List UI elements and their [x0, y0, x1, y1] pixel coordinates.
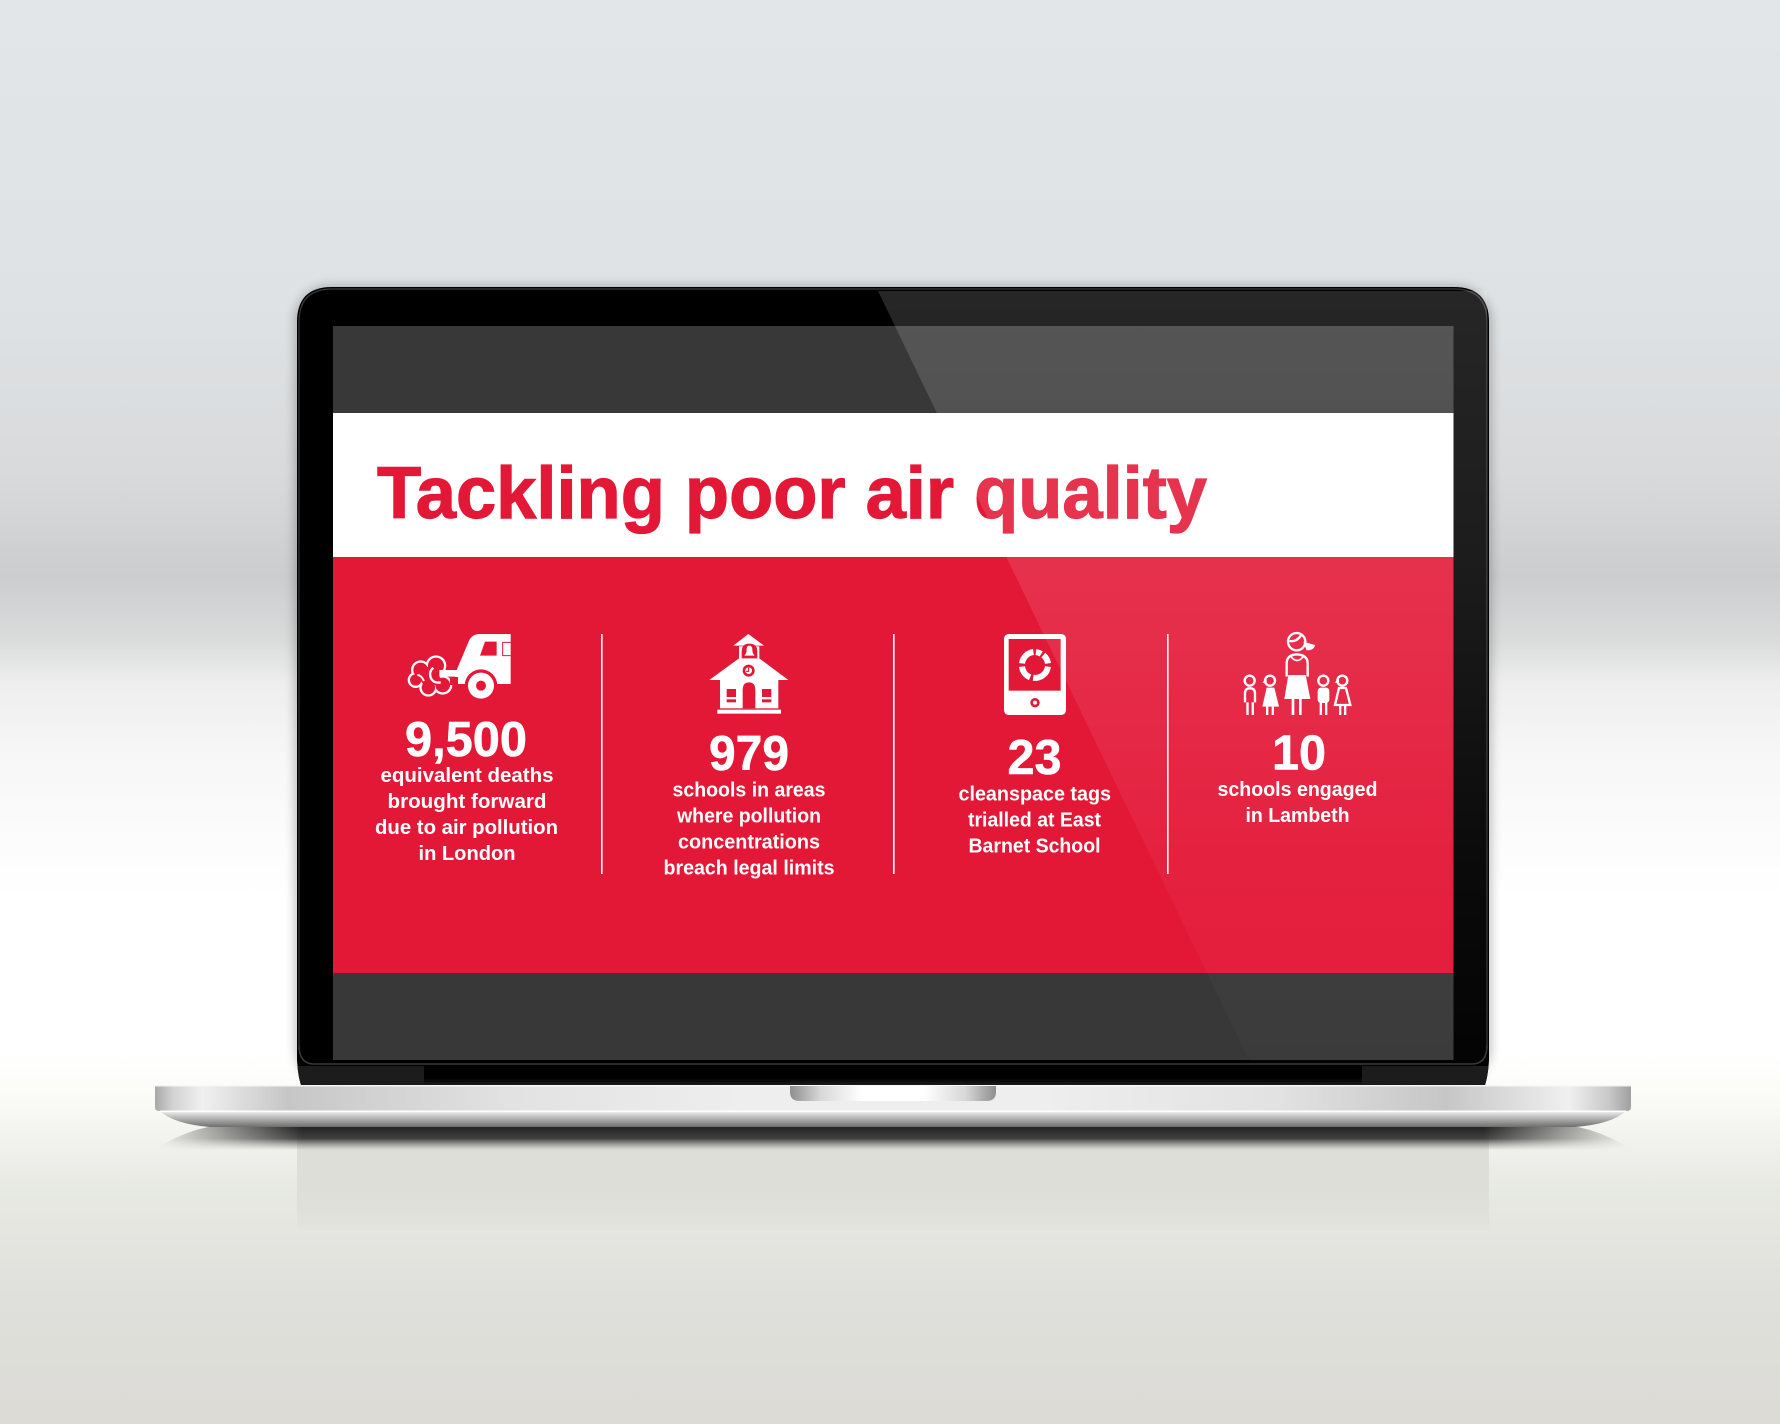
description: concentrations	[678, 830, 820, 854]
laptop	[155, 285, 1631, 1152]
icon: teacher with children	[1245, 633, 1350, 715]
base lower curve	[160, 1111, 1626, 1127]
description: schools engaged	[1218, 778, 1378, 801]
stat: 10 schools	[1218, 633, 1378, 827]
description: in London	[418, 842, 516, 865]
reflection of laptop on floor	[297, 1127, 1489, 1230]
number: 9,500	[405, 713, 527, 767]
icon: tablet with donut chart	[1004, 634, 1066, 715]
description: Barnet School	[968, 834, 1100, 858]
description: brought forward	[388, 790, 546, 813]
laptop lid	[297, 287, 1489, 1085]
divider	[1167, 634, 1169, 874]
description: in Lambeth	[1246, 804, 1350, 827]
lid soft shadow	[294, 285, 1492, 1083]
description	[1218, 778, 1378, 827]
description: cleanspace tags	[958, 782, 1111, 806]
screen top band	[333, 326, 1454, 413]
description: schools in areas	[672, 778, 826, 802]
laptop base	[155, 1085, 1631, 1152]
description: due to air pollution	[375, 816, 558, 839]
screen glare	[878, 291, 1487, 1062]
stat: 9,500 deaths	[375, 634, 558, 865]
description	[375, 764, 558, 865]
stat: 23 tags	[958, 634, 1111, 858]
title band	[333, 413, 1454, 557]
description: equivalent deaths	[380, 764, 554, 787]
divider	[893, 634, 895, 874]
description	[664, 778, 834, 880]
trackpad notch	[790, 1086, 996, 1101]
number: 979	[709, 727, 789, 781]
base shadow	[167, 1127, 1620, 1150]
stat: 979 schools	[664, 634, 834, 880]
screen	[333, 326, 1454, 1060]
description: trialled at East	[968, 808, 1101, 832]
title: Tackling poor air quality	[377, 451, 1207, 534]
number: 10	[1272, 726, 1326, 780]
description	[958, 782, 1111, 858]
icon: truck with exhaust cloud	[408, 634, 511, 702]
divider	[601, 634, 603, 874]
screen bottom band	[333, 973, 1454, 1060]
red panel	[333, 557, 1454, 973]
description: where pollution	[676, 804, 821, 828]
number: 23	[1008, 731, 1062, 785]
icon: school house	[709, 634, 788, 714]
description: breach legal limits	[664, 856, 834, 880]
base top slab	[155, 1085, 1631, 1111]
